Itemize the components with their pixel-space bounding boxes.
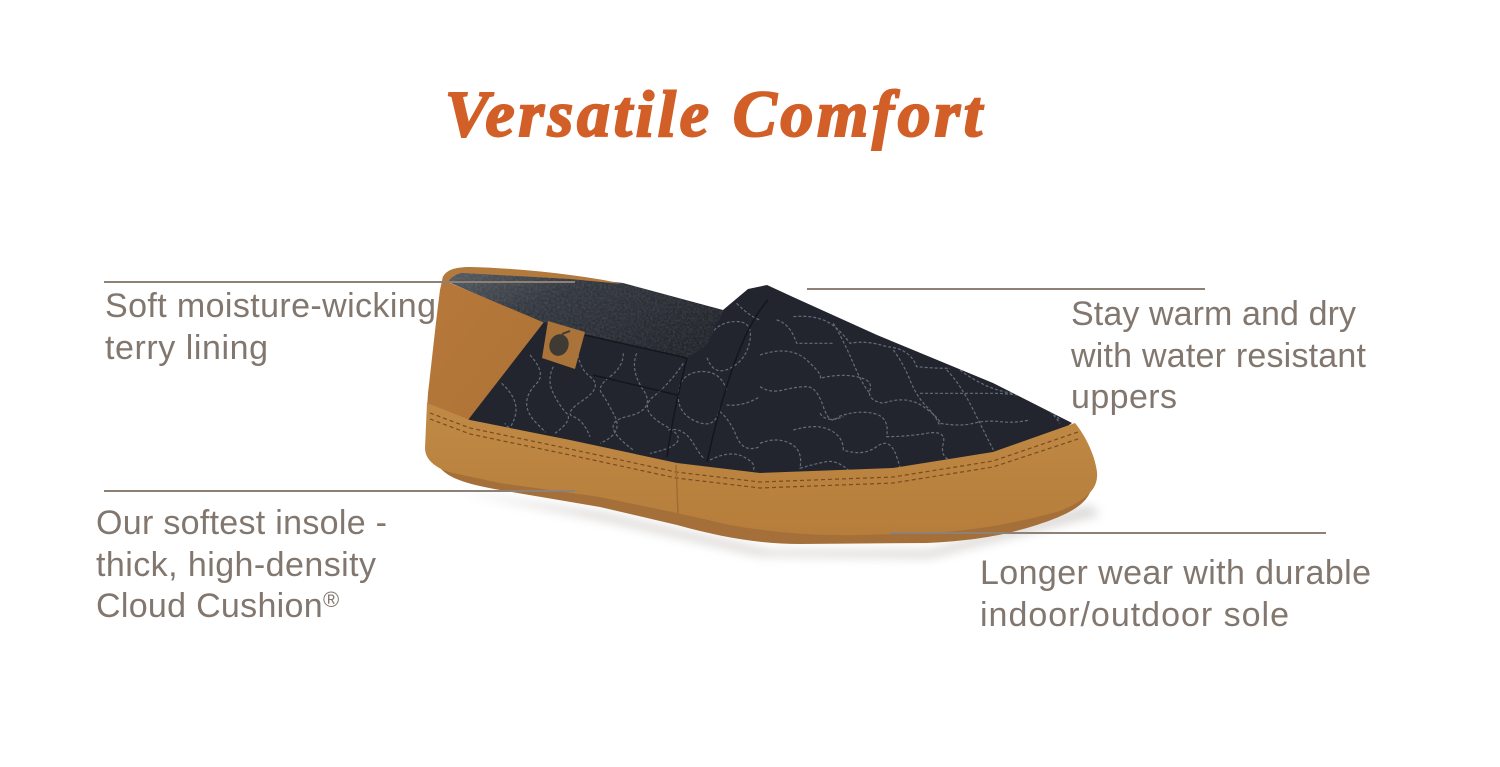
callout: insole: ®	[323, 587, 339, 612]
callout: water resistant uppers: with water resistant	[1070, 337, 1367, 375]
title: Versatile Comfort	[445, 78, 984, 151]
callout: insole: thick, high-density	[96, 546, 376, 584]
brand label patch	[542, 321, 585, 369]
band seams	[585, 300, 768, 462]
lining	[446, 272, 723, 360]
callout: water resistant uppers	[807, 289, 1367, 416]
collar rim	[443, 267, 622, 284]
foxing stitching	[430, 413, 1081, 488]
outsole	[433, 455, 1091, 544]
quilting stitches: toe	[760, 316, 1060, 470]
callout: terry lining: Soft moisture-wicking	[105, 287, 436, 325]
heel suede	[427, 276, 545, 430]
callout: terry lining	[104, 282, 575, 367]
ground shadow	[460, 492, 1100, 558]
shoe illustration	[425, 267, 1100, 558]
quilting stitches: side panel	[502, 303, 760, 470]
callout: insole	[96, 491, 575, 625]
callout: water resistant uppers: uppers	[1071, 378, 1177, 416]
callout: insole: Cloud Cushion	[96, 587, 323, 625]
callout: water resistant uppers: Stay warm and dry	[1071, 295, 1356, 333]
callout: terry lining: terry lining	[105, 329, 268, 367]
callout: durable sole: Longer wear with durable	[980, 554, 1371, 592]
quilted upper	[468, 285, 1072, 478]
callout: insole: Our softest insole -	[96, 504, 387, 542]
suede foxing	[425, 403, 1097, 535]
callout: durable sole	[890, 533, 1371, 634]
callout: durable sole: indoor/outdoor sole	[980, 596, 1289, 634]
lining terry texture	[446, 272, 723, 360]
